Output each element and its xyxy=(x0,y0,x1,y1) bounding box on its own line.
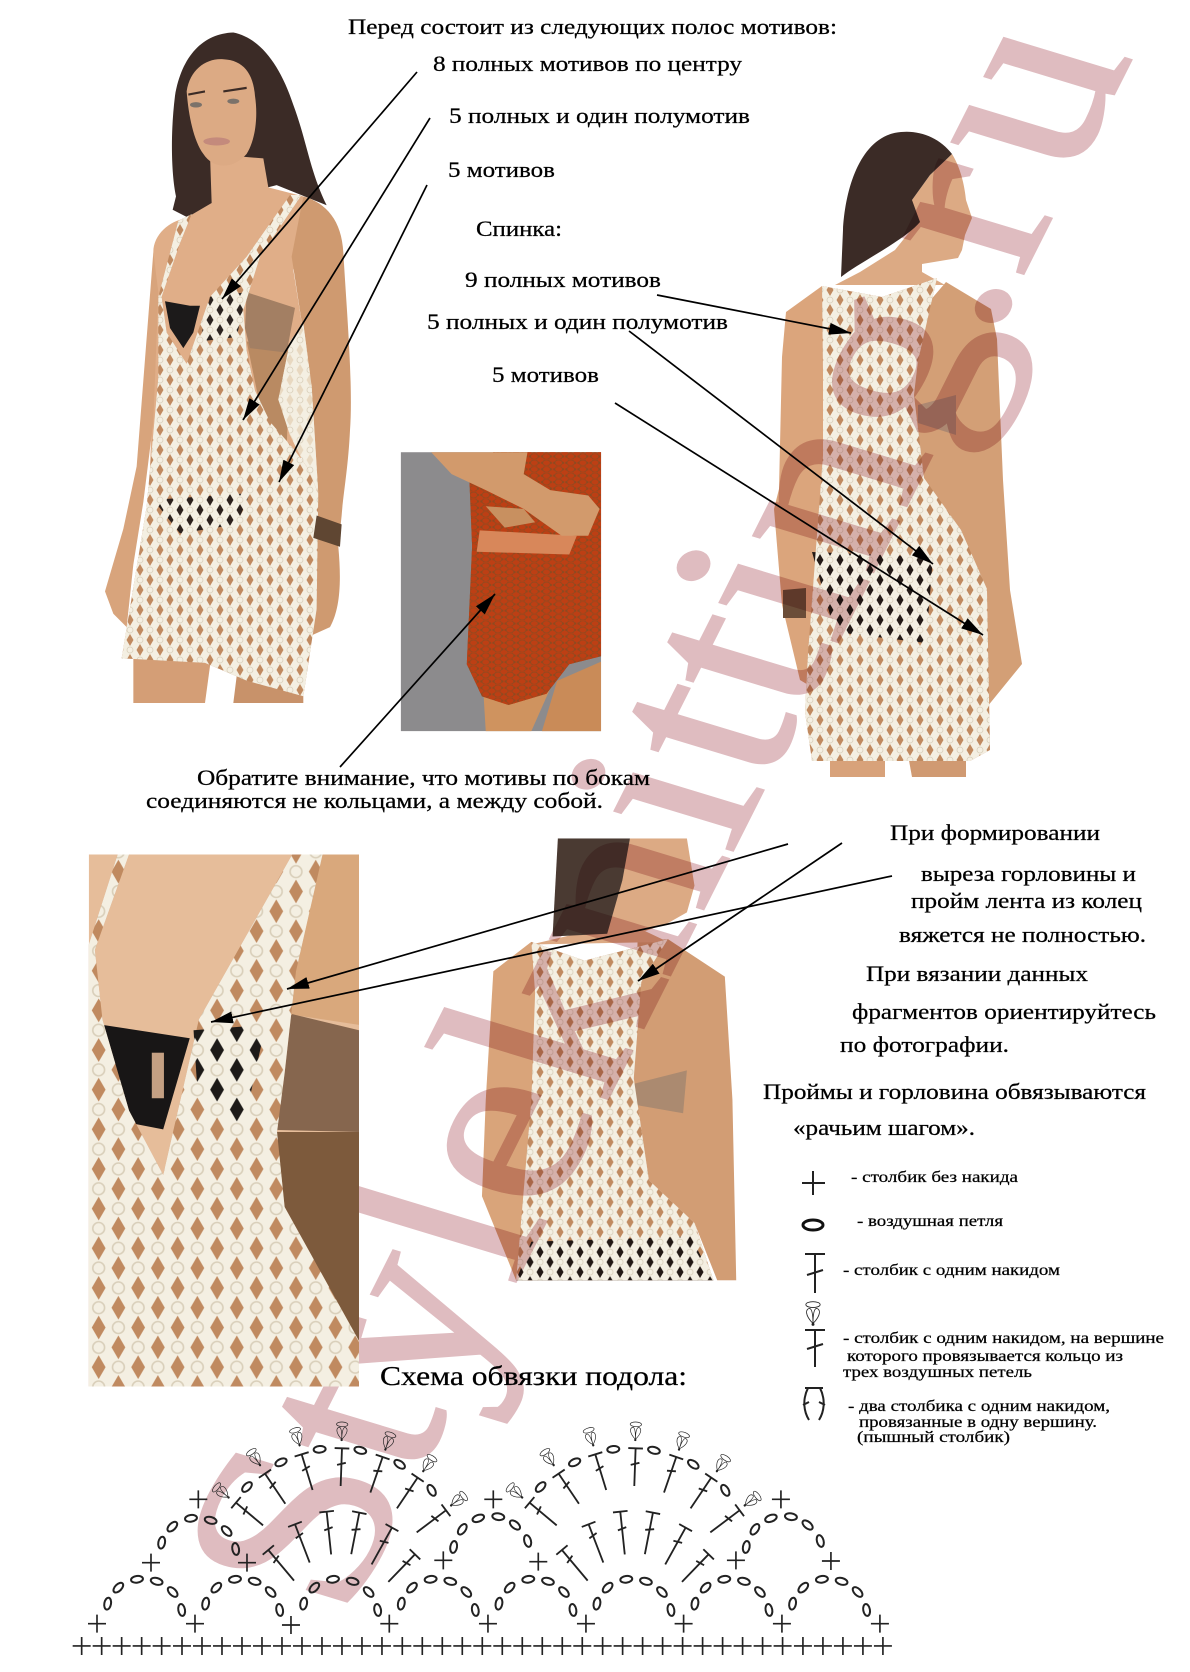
note: edging: Проймы и горловина обвязываются xyxy=(763,1079,1146,1104)
legend item: chain stitch: - воздушная петля xyxy=(857,1213,1004,1230)
photo: model back view in white crochet dress xyxy=(774,132,1022,777)
note: edging: «рачьим шагом». xyxy=(793,1115,975,1140)
note: neckline and armhole forming: При формировании xyxy=(890,820,1100,845)
legend: stitch symbols xyxy=(802,1169,1164,1446)
chart: hem edging crochet diagram xyxy=(73,1422,892,1655)
legend item: puff stitch: (пышный столбик) xyxy=(857,1429,1010,1446)
arrow: close-up neckline lower xyxy=(211,876,892,1022)
arrow: front outer strip xyxy=(279,185,427,482)
heading: back: Спинка: xyxy=(476,216,562,241)
note: side motif joining xyxy=(146,765,650,813)
note: neckline and armhole forming: фрагментов ориентируйтесь xyxy=(852,999,1156,1024)
note: neckline and armhole forming: по фотографии. xyxy=(840,1032,1009,1057)
legend item: double crochet with picot xyxy=(805,1302,1164,1381)
note: edging xyxy=(763,1079,1146,1140)
photo: orange crochet dress xyxy=(401,452,601,731)
note: neckline and armhole forming: При вязании данных xyxy=(866,961,1088,986)
arrow: orange dress side xyxy=(340,594,495,767)
note: side motif joining: Обратите внимание, что мотивы по бокам xyxy=(197,765,650,790)
legend item: chain stitch xyxy=(803,1213,1004,1230)
heading: front strips: Перед состоит из следующих полос мотивов: xyxy=(348,14,837,39)
label: front outer strip: 5 мотивов xyxy=(448,157,555,182)
arrow: front centre strip xyxy=(222,72,417,299)
legend item: double crochet xyxy=(805,1254,1060,1293)
legend item: double crochet with picot: - столбик с одним накидом, на вершине xyxy=(843,1330,1164,1347)
legend item: puff stitch xyxy=(803,1388,1110,1446)
legend item: puff stitch: - два столбика с одним накидом, xyxy=(848,1398,1110,1415)
label: back side strip: 5 полных и один полумотив xyxy=(427,309,728,334)
legend item: double crochet with picot: которого провязывается кольцо из xyxy=(847,1348,1123,1365)
legend item: single crochet xyxy=(802,1169,1018,1195)
legend item: single crochet: - столбик без накида xyxy=(851,1169,1018,1186)
label: front side strip: 5 полных и один полумотив xyxy=(449,103,750,128)
arrows: pointers from labels to photos xyxy=(211,72,983,1022)
heading: hem chart: Схема обвязки подола: xyxy=(380,1361,687,1391)
watermark: site name: Styleknitting.ru xyxy=(113,0,1190,1637)
label: back outer strip: 5 мотивов xyxy=(492,362,599,387)
legend item: double crochet: - столбик с одним накидом xyxy=(843,1262,1060,1279)
arrow: back armhole xyxy=(638,843,842,981)
label: back centre strip: 9 полных мотивов xyxy=(465,267,661,292)
note: neckline and armhole forming: вяжется не полностью. xyxy=(899,922,1146,947)
arrow: front side strip xyxy=(243,118,430,420)
legend item: puff stitch: провязанные в одну вершину. xyxy=(859,1414,1097,1431)
photo: back close-up of neck and armhole xyxy=(482,838,736,1280)
note: neckline and armhole forming: пройм лента из колец xyxy=(911,888,1142,913)
photo: front close-up of neckline xyxy=(89,854,359,1386)
photo: model front view in white crochet dress xyxy=(105,32,351,703)
arrow: close-up neckline upper xyxy=(287,844,788,989)
legend item: double crochet with picot: трех воздушных петель xyxy=(843,1364,1032,1381)
label: front centre strip: 8 полных мотивов по центру xyxy=(433,51,742,76)
arrow: back outer strip xyxy=(615,403,983,635)
note: neckline and armhole forming: выреза горловины и xyxy=(921,861,1136,886)
arrow: back centre strip xyxy=(657,295,851,333)
arrow: back side strip xyxy=(629,331,933,564)
note: neckline and armhole forming xyxy=(840,820,1156,1057)
note: side motif joining: соединяются не кольцами, а между собой. xyxy=(146,788,603,813)
